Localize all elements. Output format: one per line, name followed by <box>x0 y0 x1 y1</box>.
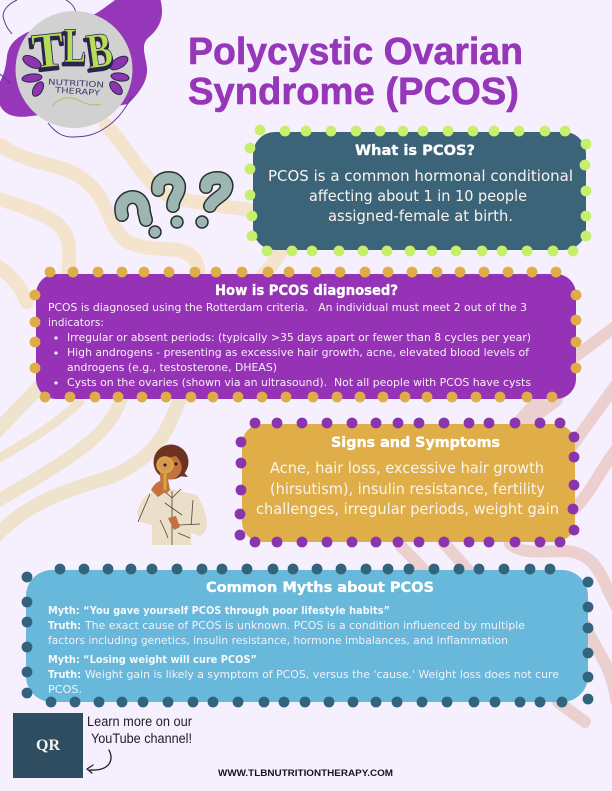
myth 1: Myth: “You gave yourself PCOS through poor lifestyle habits” <box>48 605 390 617</box>
text block <box>48 302 531 389</box>
myth 1: The exact cause of PCOS is unknown. PCOS is a condition influenced by multiple <box>84 620 525 632</box>
myth 2: Weight gain is likely a symptom of PCOS, versus the 'cause.' Weight loss does not cure <box>85 669 559 681</box>
heading: What is PCOS? <box>355 143 475 159</box>
logo letters: B <box>83 20 116 79</box>
text block: indicators: <box>48 317 104 329</box>
myth 1: factors including genetics, insulin resistance, hormone imbalances, and inflammation <box>48 635 508 647</box>
title <box>188 31 523 113</box>
heading: Common Myths about PCOS <box>206 580 434 596</box>
logo subtitle <box>48 78 104 98</box>
logo letters: T <box>29 20 67 79</box>
logo letters: L <box>62 20 86 76</box>
arrow <box>87 750 111 773</box>
myth 1: Truth: <box>48 620 81 632</box>
text block: Acne, hair loss, excessive hair growth <box>270 459 544 477</box>
text block: Cysts on the ovaries (shown via an ultrasound). Not all people with PCOS have cysts <box>67 377 531 389</box>
QR placeholder: QR <box>36 737 60 754</box>
title: Polycystic Ovarian <box>188 31 523 73</box>
title: Syndrome (PCOS) <box>188 71 519 113</box>
heading: Signs and Symptoms <box>331 435 500 451</box>
icon: question marks <box>121 178 227 238</box>
myth 1 <box>48 605 525 647</box>
myth 2 <box>48 654 559 696</box>
text block <box>256 459 559 518</box>
myth 2: PCOS. <box>48 684 82 696</box>
text block: High androgens - presenting as excessive hair growth, acne, elevated blood levels of <box>67 347 529 359</box>
text block: affecting about 1 in 10 people <box>309 187 527 205</box>
icon: person with magnifying glass <box>137 444 207 545</box>
text block: PCOS is a common hormonal conditional <box>268 167 573 185</box>
panel: signs and symptoms <box>240 423 575 542</box>
text block <box>268 167 573 225</box>
logo subtitle: THERAPY <box>54 85 100 98</box>
panel: common myths <box>26 569 588 702</box>
logo: TLB Nutrition Therapy <box>0 0 162 137</box>
logo letters: L <box>64 17 86 73</box>
QR placeholder <box>13 713 83 778</box>
YouTube call to action: YouTube channel! <box>91 731 192 746</box>
text block: challenges, irregular periods, weight gain <box>256 500 559 518</box>
text block: Irregular or absent periods: (typically >35 days apart or fewer than 8 cycles per year) <box>67 332 531 344</box>
text block: (hirsutism), insulin resistance, fertility <box>270 480 545 498</box>
myth 2: Truth: <box>48 669 81 681</box>
icon: logo petals <box>21 53 130 98</box>
website footer: WWW.TLBNUTRITIONTHERAPY.COM <box>218 768 393 779</box>
logo letters: B <box>82 23 116 83</box>
YouTube call to action <box>87 714 192 746</box>
YouTube call to action: Learn more on our <box>87 714 192 729</box>
text block: assigned-female at birth. <box>328 207 513 225</box>
myth 2: Myth: “Losing weight will cure PCOS” <box>48 654 257 666</box>
logo subtitle: NUTRITION <box>48 78 104 89</box>
text block: androgens (e.g., testosterone, DHEAS) <box>67 362 277 374</box>
heading: How is PCOS diagnosed? <box>215 283 398 299</box>
panel: what is PCOS <box>250 130 586 251</box>
text block: PCOS is diagnosed using the Rotterdam criteria. An individual must meet 2 out of the 3 <box>48 302 527 314</box>
panel: how is PCOS diagnosed <box>35 272 576 399</box>
logo letters: T <box>27 23 67 83</box>
logo letters <box>27 17 116 83</box>
